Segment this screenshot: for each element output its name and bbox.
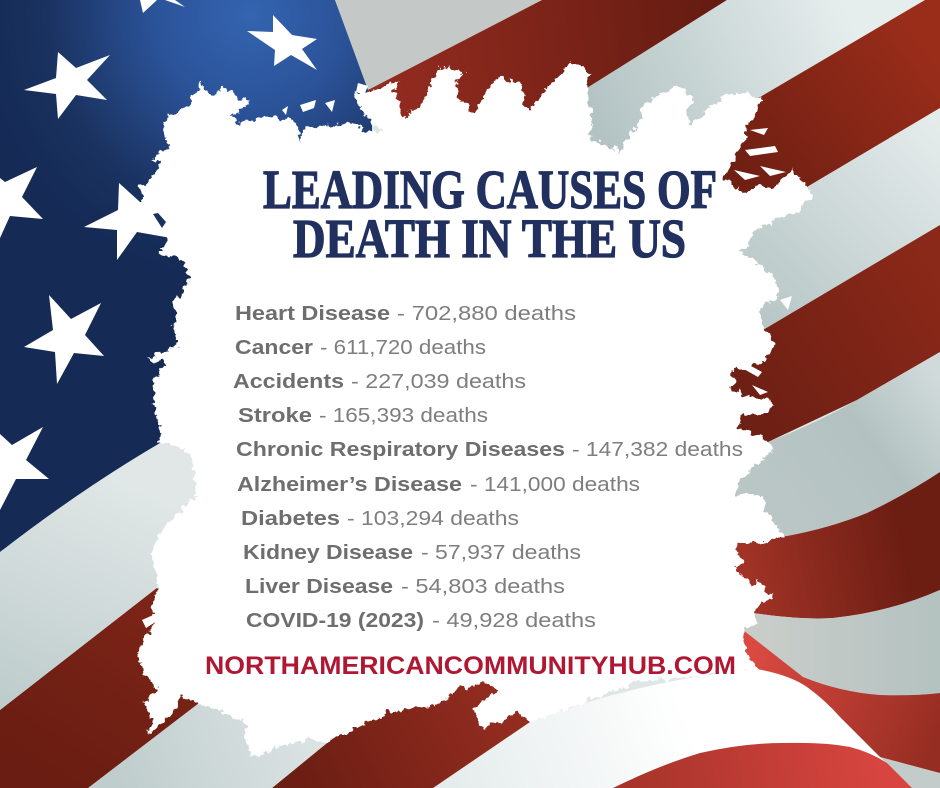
stars (0, 0, 317, 510)
row: alzheimer's disease: Alzheimer’s Disease (237, 473, 462, 496)
title: LEADING CAUSES OF (263, 159, 717, 220)
title (263, 159, 717, 269)
row: diabetes: Diabetes (241, 507, 340, 530)
row: cancer (235, 336, 486, 359)
row: covid-19: - 49,928 deaths (432, 609, 596, 632)
row: liver disease (245, 575, 565, 598)
white stripe: bottom-left lower (88, 700, 340, 788)
row: liver disease: - 54,803 deaths (401, 575, 565, 598)
row: cancer: - 611,720 deaths (320, 336, 486, 359)
row: heart disease: - 702,880 deaths (397, 302, 576, 325)
star: upper left (24, 52, 110, 119)
paint flecks: blue (137, 213, 166, 240)
row: chronic respiratory diseases (236, 438, 743, 461)
row: alzheimer's disease (237, 473, 640, 496)
website url: NORTHAMERICANCOMMUNITYHUB.COM (205, 652, 736, 680)
star: middle left (24, 295, 104, 384)
red stripe: bottom left (0, 587, 230, 788)
star: lower left edge (0, 427, 49, 510)
row: accidents (233, 370, 526, 393)
white wave (433, 669, 912, 788)
red stripe: top (368, 0, 727, 160)
paint specks (140, 83, 792, 666)
row: heart disease: Heart Disease (235, 302, 390, 325)
row: kidney disease (243, 541, 581, 564)
white stripe: left (0, 440, 220, 710)
row: stroke (238, 404, 488, 427)
blue canton (0, 0, 372, 552)
white stripe: upper right (587, 0, 925, 200)
row: heart disease (235, 302, 576, 325)
star: top right (247, 15, 317, 70)
row: cancer: Cancer (235, 336, 313, 359)
red stripe: upper right (700, 0, 940, 240)
row: kidney disease: - 57,937 deaths (421, 541, 581, 564)
row: chronic respiratory diseases: Chronic Respiratory Diseases (236, 438, 565, 461)
grey stripe: top (335, 0, 542, 90)
row: covid-19 (246, 609, 596, 632)
list of causes (233, 302, 743, 632)
star: centre left (84, 183, 171, 260)
grey stripe: bottom right (740, 590, 940, 695)
row: diabetes: - 103,294 deaths (347, 507, 519, 530)
white stripe: right (700, 108, 940, 350)
row: kidney disease: Kidney Disease (243, 541, 413, 564)
row: stroke: Stroke (238, 404, 312, 427)
row: accidents: - 227,039 deaths (351, 370, 526, 393)
grey corner (880, 757, 940, 788)
white stripe: lower right (700, 352, 940, 550)
row: chronic respiratory diseases: - 147,382 deaths (572, 438, 743, 461)
star: left edge (0, 167, 43, 238)
title: DEATH IN THE US (293, 208, 686, 269)
row: alzheimer's disease: - 141,000 deaths (470, 473, 640, 496)
red stripe: lower right (700, 472, 940, 618)
row: accidents: Accidents (233, 370, 344, 393)
red stripe: bottom centre (613, 743, 912, 788)
star: top partial (140, 0, 185, 13)
red stripe: bottom middle (272, 670, 530, 788)
white brush panel (137, 63, 812, 757)
row: stroke: - 165,393 deaths (319, 404, 488, 427)
row: liver disease: Liver Disease (245, 575, 393, 598)
row: covid-19: COVID-19 (2023) (246, 609, 424, 632)
row: diabetes (241, 507, 519, 530)
red stripe: right (700, 225, 940, 450)
bright red stripe (740, 630, 940, 773)
